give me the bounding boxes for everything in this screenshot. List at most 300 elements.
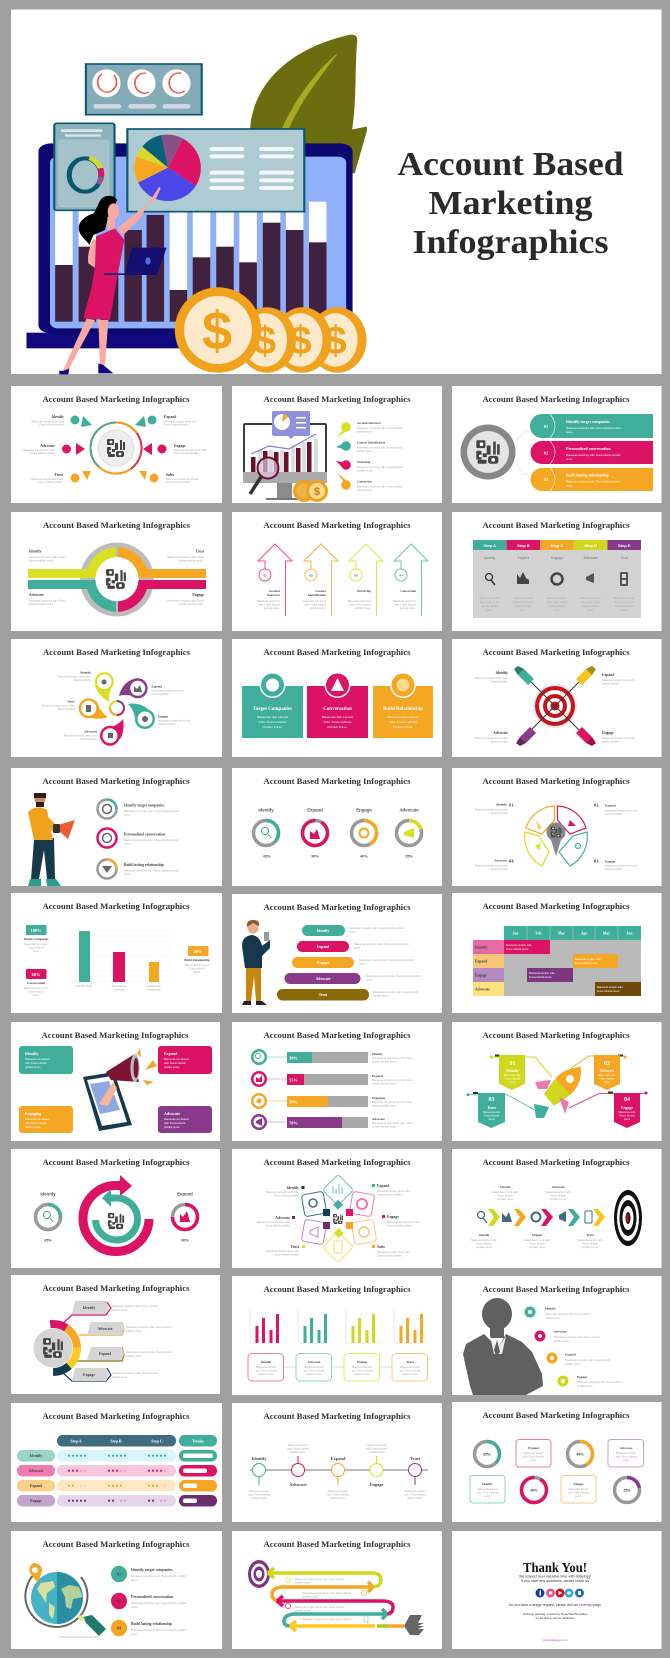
bars: 03: [544, 477, 549, 482]
labels and percentages: Expand: [307, 808, 323, 812]
arrow labels: Maecenas nonummy: [257, 600, 281, 603]
list: Personalized conversation: [131, 1595, 174, 1599]
cards: Expand: [528, 1446, 539, 1450]
step labels: Maecenas tempor lorem odio: [32, 420, 65, 424]
heading: Account Based Marketing Infographics: [42, 777, 190, 786]
cards: porttitor purus.: [306, 1373, 322, 1376]
right text: porttitor purus.: [126, 1355, 142, 1358]
bar chart: Personalized: [112, 985, 127, 988]
labels: lobortis porttitor: [80, 738, 97, 741]
connectors: [468, 1056, 646, 1110]
banners: 02: [604, 1061, 610, 1067]
banners: Engage: [621, 1106, 633, 1110]
four text boxes: odio. Fusce lobortis: [164, 1122, 186, 1125]
labels: Maecenas tempor lorem odio.: [475, 737, 508, 740]
woman figure: [59, 187, 167, 374]
panel: slide 11 four donuts: [232, 768, 442, 886]
four text boxes: Maecenas non laoreet: [25, 1058, 50, 1061]
labels: Expand: [602, 673, 615, 677]
globe with magnifier: [25, 1563, 106, 1637]
right text: porttitor purus.: [112, 1309, 128, 1312]
labels: Advocate: [275, 1216, 290, 1220]
cards: Maecenas tempor: [568, 1488, 589, 1491]
stat boxes: Maecenas Non Lorem: [185, 964, 209, 967]
labels: Maecenas nonummy odio. Fusce: [29, 600, 66, 602]
table rows: Advocate: [29, 1469, 44, 1473]
cards: Maecenas tempor: [352, 1366, 372, 1369]
step labels: Fusce lobortis porttitor: [164, 424, 189, 426]
heading: Account Based Marketing Infographics: [42, 1031, 189, 1040]
gantt: Fusce lobortis purus: [529, 976, 552, 979]
card build relationship: Maecenas Non Laoreet: [387, 715, 419, 719]
text blocks: Engage: [532, 1233, 543, 1237]
four list items: Nurturing: [357, 460, 371, 464]
right text: Maecenas nonummy odio. Fusce lobortis: [126, 1351, 172, 1354]
labels: [29, 550, 205, 606]
list: purus.: [131, 1606, 138, 1609]
arrow labels: odio. Fusce lobortis: [258, 604, 281, 606]
list: Maecenas nonummy odio. Fusce lobortis: [577, 1381, 623, 1384]
banners: Maecenas odio: [619, 1111, 636, 1114]
text blocks: Identify: [479, 1233, 490, 1237]
panel: slide 14 pyramid pills with man: [232, 894, 442, 1013]
timeline labels: Maecenas tempor: [288, 1444, 308, 1447]
labels: Expand: [152, 684, 162, 688]
cards: Advocate: [308, 1360, 321, 1364]
labels: Maecenas tempor lorem odio.: [475, 808, 508, 812]
step labels: Maecenas tempor lorem odio: [166, 478, 199, 481]
labels: lobortis porttitor purus.: [29, 603, 54, 606]
hero title: Infographics: [412, 224, 608, 261]
pie chart dashboard panel: [127, 129, 304, 212]
row text: lobortis porttitor purus.: [372, 1104, 397, 1108]
right text: Maecenas nonummy odio. Fusce lobortis: [112, 1372, 158, 1375]
request text: SlideEgg Hashtag, sourced by RoverStartTemplates: [523, 1612, 588, 1616]
labels: Maecenas tempor lorem odio.: [377, 1251, 410, 1254]
table: Maecenas tempor: [513, 597, 534, 600]
labels: lobortis porttitor: [152, 693, 169, 696]
panel: slide 23 four small bar charts: [232, 1276, 442, 1395]
pyramid pills: purus.: [349, 930, 356, 934]
stat boxes: Purus: [33, 950, 40, 953]
step labels: Fusce lobortis porttitor: [166, 481, 191, 484]
heading: Account Based Marketing Infographics: [264, 1031, 411, 1040]
panel: slide 2 monitor analytics: [232, 386, 442, 503]
heading: Account Based Marketing Infographics: [42, 1158, 190, 1167]
items with progress rings: purus.: [124, 873, 131, 876]
bar chart: Relationship: [147, 988, 161, 992]
progress rows: 15%: [289, 1078, 298, 1082]
labels: Fusce lobortis porttitor: [274, 1194, 299, 1198]
four text boxes: porttitor purus.: [164, 1066, 180, 1069]
man figure: [28, 793, 75, 886]
connector end dots: [466, 1054, 648, 1096]
table: lobortis porttitor: [481, 605, 499, 608]
labels: Advocate: [494, 858, 508, 862]
grey circle: [460, 424, 536, 480]
table: Step A: [484, 543, 496, 548]
heading: Account Based Marketing Infographics: [42, 395, 190, 404]
items with progress rings: [98, 800, 179, 878]
step icons: [62, 416, 166, 482]
right donut: [172, 1204, 198, 1230]
table: Expand: [518, 556, 529, 560]
pyramid pills: purus.: [366, 978, 373, 982]
timeline labels: Maecenas tempor: [328, 1490, 348, 1493]
arrow labels: porttitor purus.: [310, 607, 326, 610]
labels: 04.: [509, 858, 514, 864]
cards: porttitor purus.: [402, 1373, 418, 1376]
text blocks: Maecenas tempor odio: [545, 1191, 571, 1194]
hero title: Account Based: [398, 146, 624, 183]
labels: lobortis porttitor purus.: [179, 603, 204, 606]
labels: Engage: [605, 860, 616, 864]
labels: Expand: [377, 1184, 390, 1188]
list: 03: [117, 1626, 122, 1630]
monitor illustration: [243, 411, 328, 502]
banners: 03: [488, 1097, 494, 1103]
connectors and pills: Expand: [99, 1352, 112, 1356]
pyramid pills: [277, 925, 421, 1000]
labels: lobortis porttitor: [74, 679, 91, 682]
heading: Account Based Marketing Infographics: [42, 1540, 190, 1549]
four list items: porttitor purus.: [357, 470, 373, 472]
cards: Identify: [482, 1482, 493, 1486]
table: lorem odio. Fusce: [513, 601, 534, 604]
arrow labels: 04: [399, 574, 403, 578]
request text: www.slideegg.com: [543, 1638, 568, 1642]
banners: purus: [624, 1118, 631, 1121]
arrow labels: porttitor purus.: [400, 607, 416, 610]
arrow labels: Contact: [315, 589, 327, 593]
step labels: Maecenas tempor lorem odio: [31, 478, 64, 481]
timeline labels: odio. Fusce lobortis: [327, 1494, 350, 1496]
labels: Engage: [602, 731, 614, 735]
hero title: Marketing: [428, 185, 592, 222]
labels: Maecenas tempor lorem odio.: [257, 1221, 290, 1224]
card conversation: Maecenas Non Laoreet: [322, 715, 353, 719]
table headers: Totales: [192, 1438, 204, 1444]
progress rows: 50%: [289, 1100, 298, 1104]
list: [524, 1306, 623, 1388]
labels and percentages: Advocate: [399, 808, 419, 812]
card conversation: Porttitor Purus.: [327, 725, 348, 729]
timeline labels: porttitor purus.: [290, 1451, 306, 1454]
heading: Account Based Marketing Infographics: [264, 1285, 411, 1294]
tablet panel: [54, 123, 115, 210]
step labels: Engage: [174, 444, 186, 448]
gantt: Expand: [475, 960, 488, 964]
items with progress rings: Personalized conversation: [124, 832, 165, 836]
thank you heading: Thank You!: [523, 1561, 587, 1576]
cards: odio. Fusce lobortis: [568, 1492, 590, 1494]
hub: [19, 1314, 87, 1382]
labels: [475, 671, 635, 744]
labels and percentages: Identify: [258, 808, 274, 812]
stat boxes: 60%: [32, 972, 40, 977]
panel: slide 1 circular six steps: [11, 386, 222, 503]
arrow labels: porttitor purus.: [355, 607, 371, 610]
cards: odio. Fusce lobortis: [523, 1456, 545, 1458]
four text boxes: odio. Fusce lobortis: [25, 1062, 47, 1065]
monitor illustration: $: [314, 486, 320, 498]
arrow labels: Interview: [267, 593, 281, 597]
row text: lobortis porttitor purus.: [372, 1060, 397, 1064]
three gauge panel: [86, 64, 202, 115]
labels: Engage: [387, 1215, 399, 1219]
donut values: [483, 1452, 631, 1492]
bars: [530, 414, 653, 491]
list: Engage: [577, 1375, 588, 1379]
cards: [470, 1440, 644, 1503]
pyramid pills: Maecenas nonummy odio. Fusce lobortis porttitor: [366, 975, 421, 978]
items with progress rings: Maecenas nonummy odio. Fusce lobortis porttitor: [124, 839, 179, 842]
heading: Account Based Marketing Infographics: [264, 1540, 411, 1549]
donut values: 65%: [483, 1452, 491, 1456]
right text: porttitor purus.: [112, 1376, 128, 1379]
bars: Identify target companies: [566, 419, 610, 424]
stat boxes: [24, 925, 210, 997]
text blocks: Maecenas tempor odio: [471, 1239, 497, 1242]
labels: Maecenas tempor lorem odio.: [602, 737, 635, 740]
four text boxes: Maecenas non laoreet: [164, 1058, 189, 1061]
list: [111, 1566, 187, 1636]
list: Build lasting relationship: [131, 1622, 172, 1626]
labels: lobortis porttitor: [491, 812, 508, 815]
labels: Maecenas tempor lorem odio.: [602, 679, 635, 682]
cards: Maecenas tempor: [256, 1366, 276, 1369]
list: Maecenas nonummy odio. Fusce lobortis: [554, 1336, 600, 1339]
arrow labels: Maecenas nonummy: [348, 600, 372, 603]
arrow labels: Maecenas nonummy: [393, 600, 417, 603]
cards: purus.: [575, 1495, 582, 1498]
bars: Build lasting relationship: [566, 472, 610, 478]
items with progress rings: Maecenas nonummy odio. Fusce lobortis porttitor: [124, 870, 179, 872]
labels: Maecenas tempor lorem odio.: [266, 1191, 299, 1194]
gantt: Mar: [558, 932, 565, 936]
timeline labels: odio. Fusce lobortis: [404, 1494, 427, 1496]
table: Step C: [551, 543, 563, 548]
table rows: Engage: [30, 1499, 42, 1503]
coins: $: [289, 319, 312, 363]
list: Maecenas nonummy odio. Fusce lobortis: [545, 1313, 591, 1316]
gantt: Apr: [581, 932, 588, 936]
cards: odio. Fusce lobortis: [303, 1370, 326, 1372]
social icons: [536, 1588, 584, 1598]
progress rows: 70%: [289, 1120, 298, 1126]
labels: Maecenas tempor lorem odio.: [605, 810, 638, 812]
progress rows: [251, 1049, 368, 1130]
flower tiles: [301, 1174, 377, 1263]
cards: purus.: [623, 1459, 630, 1462]
four text boxes: Identify: [25, 1051, 39, 1056]
serpentine text: porttitor purus.: [302, 1596, 318, 1598]
stat boxes: Build Relationship: [184, 958, 210, 962]
timeline labels: Maecenas tempor: [405, 1490, 425, 1493]
serpentine arrow paths: [268, 1568, 404, 1631]
table: Advocate: [584, 556, 598, 560]
table headers: Step B: [110, 1438, 122, 1444]
four text boxes: odio. Fusce lobortis: [164, 1062, 186, 1065]
items with progress rings: purus.: [124, 842, 131, 846]
banners: Maecenas odio: [483, 1111, 501, 1114]
four list items: Maecenas nonummy odio. Fusce lobortis: [357, 427, 403, 430]
gantt: May: [603, 932, 610, 936]
table: lorem odio. Fusce: [547, 601, 568, 604]
serpentine text: Maecenas tempor lorem odio. Fusce lobortis: [302, 1618, 352, 1621]
ring and bands: [28, 542, 206, 616]
arrow labels: 01: [263, 574, 267, 578]
four list items: Maecenas nonummy odio. Fusce lobortis: [357, 486, 403, 488]
pyramid pills: Identify: [317, 929, 329, 933]
table: purus.: [621, 609, 628, 612]
labels: 02.: [594, 802, 600, 808]
panel: slide 6 steps table: [452, 512, 662, 631]
labels and percentages: 65%: [263, 854, 271, 858]
pyramid pills: purus.: [354, 946, 361, 950]
panel: slide 12 pie pieces: [452, 768, 662, 886]
heading: Account Based Marketing Infographics: [264, 777, 411, 786]
text blocks: [471, 1185, 603, 1249]
man with phone: [242, 920, 270, 1005]
text blocks: porttitor purus: [497, 1198, 513, 1201]
labels: Advocate: [84, 730, 98, 734]
table headers: Step C: [151, 1438, 163, 1444]
four list items: Maecenas nonummy odio. Fusce lobortis: [357, 446, 403, 450]
labels: Trust: [67, 700, 75, 704]
panel: slide 13 bar chart: [11, 893, 222, 1013]
request text: Do you have a design request, please visit our redesign page: [509, 1603, 601, 1607]
labels: 03.: [594, 858, 600, 864]
request text: [509, 1603, 601, 1642]
labels and percentages: Engage: [356, 808, 372, 812]
petals: [79, 672, 155, 746]
serpentine text: Maecenas tempor lorem odio. Fusce lobortis: [295, 1578, 345, 1581]
four list items: Maecenas nonummy odio. Fusce lobortis: [357, 466, 403, 469]
four list items: porttitor purus.: [357, 489, 373, 492]
bars: purus.: [566, 431, 573, 434]
text blocks: Maecenas tempor odio: [492, 1191, 518, 1194]
labels: Identify: [496, 671, 508, 675]
right text: porttitor purus.: [126, 1330, 142, 1333]
row text: Identify: [372, 1052, 383, 1056]
four text boxes: [19, 1046, 212, 1133]
timeline labels: porttitor purus.: [368, 1451, 385, 1454]
list: Maecenas nonummy odio. Fusce lobortis, porttitor: [131, 1575, 187, 1578]
donuts: [474, 1442, 640, 1507]
pyramid pills: Engage: [317, 961, 329, 965]
heading: Account Based Marketing Infographics: [43, 521, 191, 530]
card build relationship: Odio. Fusce Lobortis: [389, 720, 417, 724]
timeline labels: odio. Fusce lobortis: [366, 1448, 388, 1450]
timeline labels: [248, 1444, 427, 1500]
cards: Engage: [357, 1360, 368, 1364]
list: porttitor purus.: [554, 1340, 570, 1343]
arrow labels: 02: [309, 574, 313, 578]
labels: lobortis porttitor: [491, 740, 508, 744]
arrow labels: [257, 574, 417, 610]
sector pieces: [525, 806, 587, 866]
panel: slide 28 globe magnifier: [11, 1531, 222, 1649]
bar chart: Build lasting: [147, 985, 161, 988]
text blocks: Maecenas tempor odio: [577, 1239, 603, 1242]
four list items: [336, 421, 403, 492]
banners: Fusce lobortis: [505, 1078, 521, 1080]
step labels: Advocate: [40, 444, 55, 448]
labels: lobortis porttitor purus.: [179, 560, 204, 562]
panel: slide 21 chevron process to target: [452, 1149, 662, 1268]
arrow labels: porttitor purus.: [264, 607, 280, 610]
text blocks: porttitor purus: [582, 1246, 598, 1249]
target: [614, 1190, 642, 1246]
list: Identify: [545, 1306, 556, 1310]
four text boxes: porttitor purus.: [25, 1066, 41, 1069]
timeline labels: Expand: [331, 1456, 346, 1461]
bars: Maecenas nonummy odio. Fusce lobortis porttitor: [566, 427, 621, 430]
heading: Account Based Marketing Infographics: [264, 521, 411, 530]
labels: Fusce lobortis porttitor: [377, 1254, 402, 1258]
bars: purus.: [566, 484, 573, 488]
connectors and pills: Identify: [83, 1306, 95, 1310]
connectors and pills: Engage: [83, 1373, 95, 1377]
panel: slide 19 circular arrows: [11, 1149, 220, 1268]
heading: Account Based Marketing Infographics: [43, 648, 191, 657]
pyramid pills: Maecenas nonummy odio. Fusce lobortis: [373, 991, 419, 994]
four text boxes: odio. Fusce lobortis: [25, 1122, 47, 1125]
timeline labels: odio. Fusce lobortis: [287, 1448, 310, 1450]
table: Step D: [584, 543, 597, 548]
gantt: Identify: [475, 946, 488, 950]
text blocks: Maecenas tempor odio: [524, 1239, 550, 1242]
coins: $: [202, 301, 232, 361]
labels and percentages: [258, 808, 419, 858]
labels: Maecenas tempor lorem odio.: [152, 690, 185, 692]
card build relationship: Porttitor Purus.: [393, 725, 413, 729]
cards: Maecenas tempor: [304, 1366, 324, 1369]
table: lorem odio. Fusce: [480, 601, 500, 604]
banners: [478, 1055, 640, 1128]
heading: Account Based Marketing Infographics: [482, 1158, 630, 1167]
list: porttitor purus.: [577, 1385, 593, 1388]
gantt: Feb: [536, 932, 541, 936]
rocket: [534, 1067, 581, 1118]
labels: Maecenas tempor lorem odio.: [475, 864, 508, 868]
right text: Maecenas nonummy odio. Fusce lobortis: [126, 1326, 172, 1329]
labels: Maecenas tempor lorem odio.: [605, 864, 638, 868]
gantt: Fusce lobortis purus: [575, 962, 598, 965]
table: Maecenas tempor: [547, 597, 567, 600]
banners: 01: [510, 1061, 516, 1067]
panel: slide 17 progress bars: [232, 1022, 442, 1141]
labels: lobortis porttitor: [491, 680, 508, 684]
labels: Maecenas tempor lorem odio.: [64, 734, 97, 738]
list: Expand: [565, 1352, 576, 1356]
banners: Advocate: [600, 1069, 615, 1073]
target: [248, 1560, 270, 1588]
labels: lobortis porttitor: [605, 868, 622, 871]
panel: slide 24 businessman silhouette: [452, 1276, 662, 1395]
text blocks: Fusce lobortis: [476, 1242, 493, 1246]
connectors and pills: [63, 1301, 124, 1381]
timeline labels: porttitor purus.: [251, 1497, 267, 1500]
table rows: [17, 1450, 217, 1506]
list: Maecenas nonummy odio. Fusce lobortis, porttitor: [131, 1629, 187, 1632]
gantt: Fusce lobortis purus: [597, 990, 620, 993]
stat boxes: 40%: [194, 949, 202, 954]
panel: slide 10 man with megaphone: [11, 768, 222, 886]
table headers: [57, 1435, 217, 1446]
table: lorem odio. Fusce: [581, 601, 601, 604]
